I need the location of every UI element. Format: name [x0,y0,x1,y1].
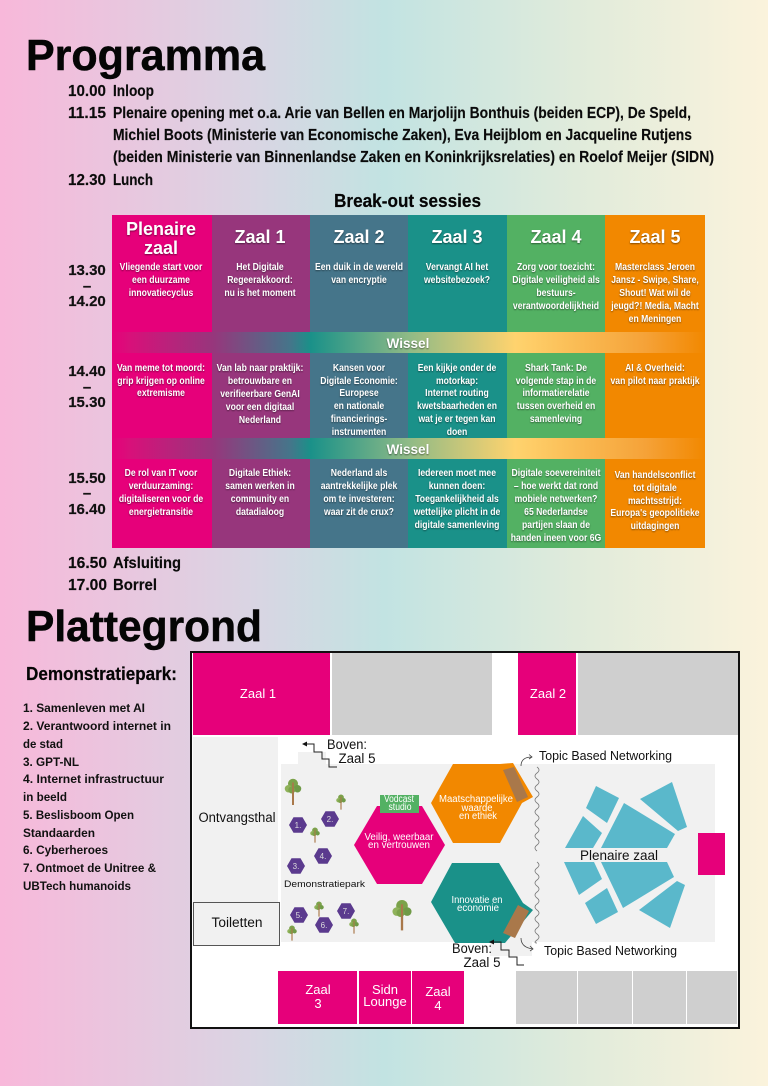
column headings: zaal [144,238,178,258]
sessions: Zaal 3: wettelijke plicht in de [413,507,500,517]
sessions: Zaal 5: en Meningen [629,314,682,324]
sessions: Zaal 1: datadialoog [236,507,285,517]
sessions: Zaal 4: samenleving [530,414,582,424]
trees [285,779,412,941]
sessions: Zaal 5: machtsstrijd: [628,496,682,506]
room: Zaal 3: 3 [314,996,322,1011]
zone: Maatschappelijke waarde en ethiek [431,763,533,843]
sessions: Zaal 1: Regeerakkoord: [227,275,293,285]
demonstration park list: 4. Internet infrastructuur [23,772,164,786]
sessions: Zaal 2: van encryptie [331,275,387,285]
plenary seating blocks [564,782,687,928]
sessions: Plenaire zaal: extremisme [137,388,185,398]
zone: Maatschappelijke waarde en ethiek: en ethiek [459,811,498,822]
heading: Break-out sessies: Break-out sessies [334,191,481,211]
networking table top [503,767,528,802]
schedule: morning items: (beiden Ministerie van Binnenlandse Zaken en Koninkrijksrelaties) en Roelof Meijer (SIDN) [113,149,714,166]
room: Zaal 1: Zaal 1 [240,686,276,701]
room: Toiletten: Toiletten [212,915,262,930]
sessions: Zaal 4: Digitale soevereiniteit [511,468,601,478]
demo location markers: 5. [296,911,302,920]
schedule: closing items: 17.00 [68,577,107,594]
sessions: Plenaire zaal: Vliegende start voor [120,262,203,272]
schedule: morning items: 11.15 [68,105,106,122]
sessions: Zaal 1: community en [231,494,290,504]
grey block top left [332,653,492,735]
demo location markers [287,811,355,933]
session table [112,215,705,548]
stairs arrow bottom [489,940,524,965]
demo location markers: 1. [295,821,301,830]
demonstration park list: 5. Beslisboom Open [23,808,134,822]
demo location markers: 7. [343,907,349,916]
demonstration park list: de stad [23,737,63,751]
schedule: morning items [68,83,714,189]
zone: Innovatie en economie [431,863,533,943]
sessions: Zaal 1: Het Digitale [236,262,284,272]
label: Vodcast studio: studio [388,802,412,813]
title: Programma: Programma [26,31,266,80]
sessions: Zaal 2: Een duik in de wereld [315,262,403,272]
sessions: Zaal 2: Digitale Economie: [320,376,398,386]
schedule: closing items: Afsluiting [113,555,181,572]
sessions: Zaal 5: AI & Overheid: [625,363,685,373]
time labels [68,262,106,518]
sessions: Zaal 2: om te investeren: [323,494,395,504]
column headings: Plenaire [126,219,196,239]
room: Sidn Lounge [359,971,411,1024]
time labels: 13.30 [68,262,106,279]
sessions: Zaal 3: kwetsbaarheden en [417,401,497,411]
table text [117,219,700,543]
break bar 1 [112,332,705,353]
column headings: Zaal 4 [530,227,582,247]
column: Plenaire zaal [112,215,212,548]
time labels: – [83,278,91,295]
grey block top right [578,653,738,735]
time labels: 15.30 [68,394,106,411]
demonstration park list: 1. Samenleven met AI [23,701,145,715]
sessions: Zaal 2: Europese [339,388,379,398]
demonstration park list: 2. Verantwoord internet in [23,719,171,733]
sessions: Zaal 2: financierings- [331,414,387,424]
sessions: Zaal 3: Toegankelijkheid als [415,494,499,504]
stage [698,833,725,875]
room: Sidn Lounge: Sidn [372,982,398,997]
sessions: Zaal 3: Internet routing [425,388,489,398]
sessions: Zaal 5: tot digitale [633,483,677,493]
room: Zaal 2: Zaal 2 [530,686,566,701]
sessions: Zaal 3: Iedereen moet mee [418,468,496,478]
sessions: Zaal 4: mobiele netwerken? [515,494,598,504]
floor plan [191,652,739,1028]
plan frame [191,652,739,1028]
label: Boven Zaal 5 top [327,737,376,766]
sessions: Zaal 1 [217,262,303,517]
sessions: Zaal 5: uitdagingen [631,521,680,531]
room: Sidn Lounge: Lounge [363,994,407,1009]
sessions: Zaal 3: kunnen doen: [429,481,485,491]
time labels: 16.40 [68,501,106,518]
sessions: Zaal 4: handen ineen voor 6G [511,533,601,543]
sessions: Zaal 4: 65 Nederlandse [524,507,588,517]
label: Topic Based Networking top: Topic Based Networking [539,749,672,763]
zone: Maatschappelijke waarde en ethiek: Maatschappelijke [439,794,513,805]
schedule: closing items [68,555,181,594]
sessions: Zaal 2: instrumenten [332,427,387,437]
demonstration park list [23,701,171,893]
zone: Maatschappelijke waarde en ethiek: waarde [461,803,493,814]
sessions: Zaal 4: tussen overheid en [517,401,596,411]
sessions: Zaal 4: – hoe werkt dat rond [514,481,598,491]
schedule: morning items: 12.30 [68,172,106,189]
heading: Demonstratiepark: Demonstratiepark: [26,664,177,684]
column: Zaal 5 [605,215,705,548]
label: Boven Zaal 5 bottom [452,941,500,970]
demo location markers: 2. [327,815,333,824]
sessions: Plenaire zaal: digitaliseren voor de [119,494,203,504]
sessions: Zaal 4: Digitale veiligheid als [512,275,600,285]
sessions: Zaal 3: websitebezoek? [423,275,490,285]
column: Zaal 3 [408,215,507,548]
sessions: Zaal 4: partijen slaan de [522,520,590,530]
zone: Innovatie en economie: Innovatie en [452,895,502,906]
sessions: Zaal 2: aantrekkelijke plek [321,481,398,491]
sessions: Zaal 4: verantwoordelijkheid [513,301,599,311]
zone: Veilig, weerbaar en vertrouwen [354,806,445,884]
room: Toiletten [194,902,280,946]
sessions: Zaal 1: betrouwbare en [228,376,292,386]
sessions: Plenaire zaal: grip krijgen op online [117,376,205,386]
sessions: Plenaire zaal: energietransitie [129,507,193,517]
sessions: Zaal 5: van pilot naar praktijk [610,376,700,386]
sessions: Zaal 4: volgende stap in de [516,376,596,386]
room: Zaal 2 [518,653,576,735]
room: Ontvangsthal area [193,737,278,902]
sessions: Zaal 5: Europa's geopolitieke [610,508,700,518]
sessions: Zaal 3 [413,262,500,530]
sessions: Zaal 3: Een kijkje onder de [418,363,496,373]
time labels: 15.50 [68,470,106,487]
sessions: Plenaire zaal: Van meme tot moord: [117,363,205,373]
demonstration park list: Standaarden [23,826,95,840]
break labels: Wissel [387,336,429,351]
sessions: Zaal 1: voor een digitaal [226,402,294,412]
sessions: Zaal 1: Digitale Ethiek: [229,468,291,478]
column: Zaal 1 [212,215,310,548]
sessions: Zaal 2 [315,262,403,517]
label: Boven Zaal 5 top: Zaal 5 [338,751,376,766]
column: Zaal 4 [507,215,605,548]
label: Plenaire zaal: Plenaire zaal [580,847,658,863]
grey blocks bottom right [516,971,737,1024]
schedule: morning items: 10.00 [68,83,106,100]
central hall floor [281,752,715,956]
sessions: Zaal 2: Nederland als [331,468,387,478]
column headings [126,219,681,258]
sessions: Zaal 4: Shark Tank: De [525,363,587,373]
room: Zaal 1 [193,653,330,735]
label: Boven Zaal 5 bottom: Boven: [452,941,492,956]
column headings: Zaal 3 [431,227,483,247]
column headings: Zaal 1 [234,227,286,247]
column headings: Zaal 2 [333,227,385,247]
sessions: Zaal 1: verifieerbare GenAI [220,389,300,399]
sessions: Plenaire zaal: een duurzame [132,275,190,285]
arrow: top networking [521,754,532,766]
column headings: Zaal 5 [629,227,681,247]
room: Zaal 4 [412,971,464,1024]
time labels: 14.40 [68,363,106,380]
demonstration park list: 6. Cyberheroes [23,843,108,857]
time labels: – [83,485,91,502]
schedule: morning items: Michiel Boots (Ministerie van Economische Zaken), Eva Heijblom en Jacqueline Rutjens [113,127,692,144]
demonstration park list: in beeld [23,790,67,804]
sessions: Zaal 5: Masterclass Jeroen [615,262,695,272]
column: Zaal 2 [310,215,408,548]
zone: Innovatie en economie: economie [457,903,499,914]
sessions: Zaal 1: nu is het moment [224,288,296,298]
sessions: Zaal 3: wat je er tegen kan [418,414,496,424]
room: Zaal 3: Zaal [305,982,331,997]
sessions: Zaal 4: Zorg voor toezicht: [517,262,595,272]
break labels: Wissel [387,442,429,457]
schedule: morning items: Inloop [113,83,154,100]
sessions: Plenaire zaal [117,262,205,517]
demo location markers: 3. [293,862,299,871]
networking table bottom [503,905,529,938]
room: Zaal 4: Zaal [425,984,451,999]
sessions: Zaal 2: waar zit de crux? [323,507,394,517]
demo location markers: 6. [321,921,327,930]
zone: Veilig, weerbaar en vertrouwen: en vertrouwen [368,840,430,851]
demo location markers: 4. [320,852,326,861]
schedule: morning items: Lunch [113,172,153,189]
demonstration park list: 7. Ontmoet de Unitree & [23,861,156,875]
partition curtains [535,767,539,943]
sessions: Zaal 5: Jansz - Swipe, Share, [611,275,699,285]
label: Boven Zaal 5 bottom: Zaal 5 [464,955,500,970]
time labels: – [83,379,91,396]
sessions: Zaal 5: jeugd?! Media, Macht [610,301,699,311]
sessions: Zaal 1: samen werken in [225,481,295,491]
room: Zaal 4: 4 [434,998,442,1013]
break labels [387,336,429,457]
zone: Veilig, weerbaar en vertrouwen: Veilig, weerbaar [364,832,434,843]
sessions: Zaal 2: Kansen voor [333,363,385,373]
sessions: Zaal 5 [610,262,700,531]
sessions: Zaal 3: digitale samenleving [415,520,500,530]
label: Boven Zaal 5 top: Boven: [327,737,367,752]
schedule: morning items: Plenaire opening met o.a. Arie van Bellen en Marjolijn Bonthuis (beiden ECP), De Speld, [113,105,691,122]
sessions: Zaal 4 [511,262,601,543]
title: Plattegrond: Plattegrond [26,602,262,651]
sessions: Zaal 5: Van handelsconflict [615,470,695,480]
label: Vodcast studio: Vodcast [384,794,414,805]
stairs arrow top [302,742,337,767]
time labels: 14.20 [68,293,106,310]
break bar 2 [112,438,705,459]
schedule: closing items: Borrel [113,577,157,594]
sessions: Zaal 3: doen [447,427,468,437]
sessions: Zaal 4: bestuurs- [536,288,576,298]
arrow: bottom networking [521,938,533,951]
sessions: Zaal 3: Vervangt AI het [426,262,488,272]
sessions: Zaal 5: Shout! Wat wil de [619,288,691,298]
room: Zaal 3 [278,971,357,1024]
sessions: Zaal 1: Nederland [239,415,281,425]
sessions: Zaal 3: motorkap: [436,376,478,386]
label: Vodcast studio [380,794,419,813]
demonstration park list: UBTech humanoids [23,879,131,893]
sessions: Zaal 4: informatierelatie [522,388,590,398]
sessions: Zaal 2: en nationale [334,401,384,411]
label: Ontvangsthal: Ontvangsthal [198,810,276,825]
sessions: Plenaire zaal: De rol van IT voor [125,468,198,478]
sessions: Plenaire zaal: innovatiecyclus [129,288,193,298]
sessions: Plenaire zaal: verduurzaming: [129,481,193,491]
label: Demonstratiepark: Demonstratiepark [284,879,365,890]
sessions: Zaal 1: Van lab naar praktijk: [217,363,303,373]
schedule: closing items: 16.50 [68,555,107,572]
demonstration park list: 3. GPT-NL [23,755,79,769]
label: Topic Based Networking bottom: Topic Based Networking [544,944,677,958]
